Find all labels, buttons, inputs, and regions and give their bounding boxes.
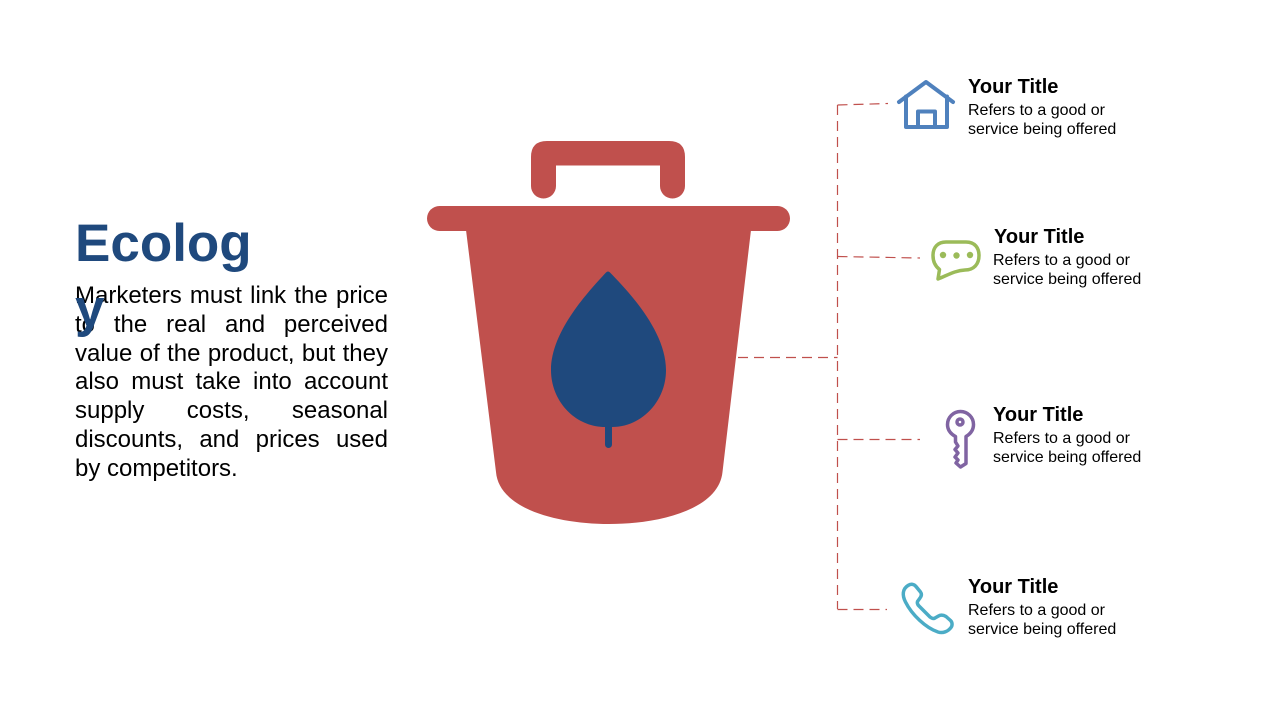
text block: item 3: Refers to a good or — [993, 430, 1130, 447]
text block: item 2: Refers to a good or — [993, 252, 1130, 269]
icon: house — [899, 82, 953, 127]
icon: phone — [903, 584, 952, 632]
icon: leaf — [551, 272, 666, 448]
text block: item 4 — [968, 576, 1116, 638]
text block: item 4: service being offered — [968, 621, 1116, 638]
title: Ecology — [75, 214, 252, 338]
text block: item 2: service being offered — [993, 271, 1141, 288]
text block: item 1: service being offered — [968, 121, 1116, 138]
bucket handle — [531, 141, 685, 198]
text block: item 4: Your Title — [968, 576, 1058, 598]
body text: Marketers must link the price to the real and perceived value of the product, but they also must take into account supply costs, seasonal discounts, and prices used by competitors. — [75, 282, 388, 482]
connector lines — [738, 104, 920, 610]
icon: key — [948, 412, 974, 467]
text block: item 3: Your Title — [993, 404, 1083, 426]
bucket body — [466, 230, 751, 524]
text block: item 1 — [968, 76, 1116, 138]
text block: item 3: service being offered — [993, 449, 1141, 466]
text block: item 3 — [993, 404, 1141, 466]
text block: item 1: Refers to a good or — [968, 102, 1105, 119]
text block: item 2 — [993, 226, 1141, 288]
text block: item 4: Refers to a good or — [968, 602, 1105, 619]
text block: item 2: Your Title — [994, 226, 1084, 248]
icon: speech bubble — [933, 242, 979, 279]
bucket rim — [427, 206, 790, 231]
text block: item 1: Your Title — [968, 76, 1058, 98]
bucket — [427, 141, 790, 524]
